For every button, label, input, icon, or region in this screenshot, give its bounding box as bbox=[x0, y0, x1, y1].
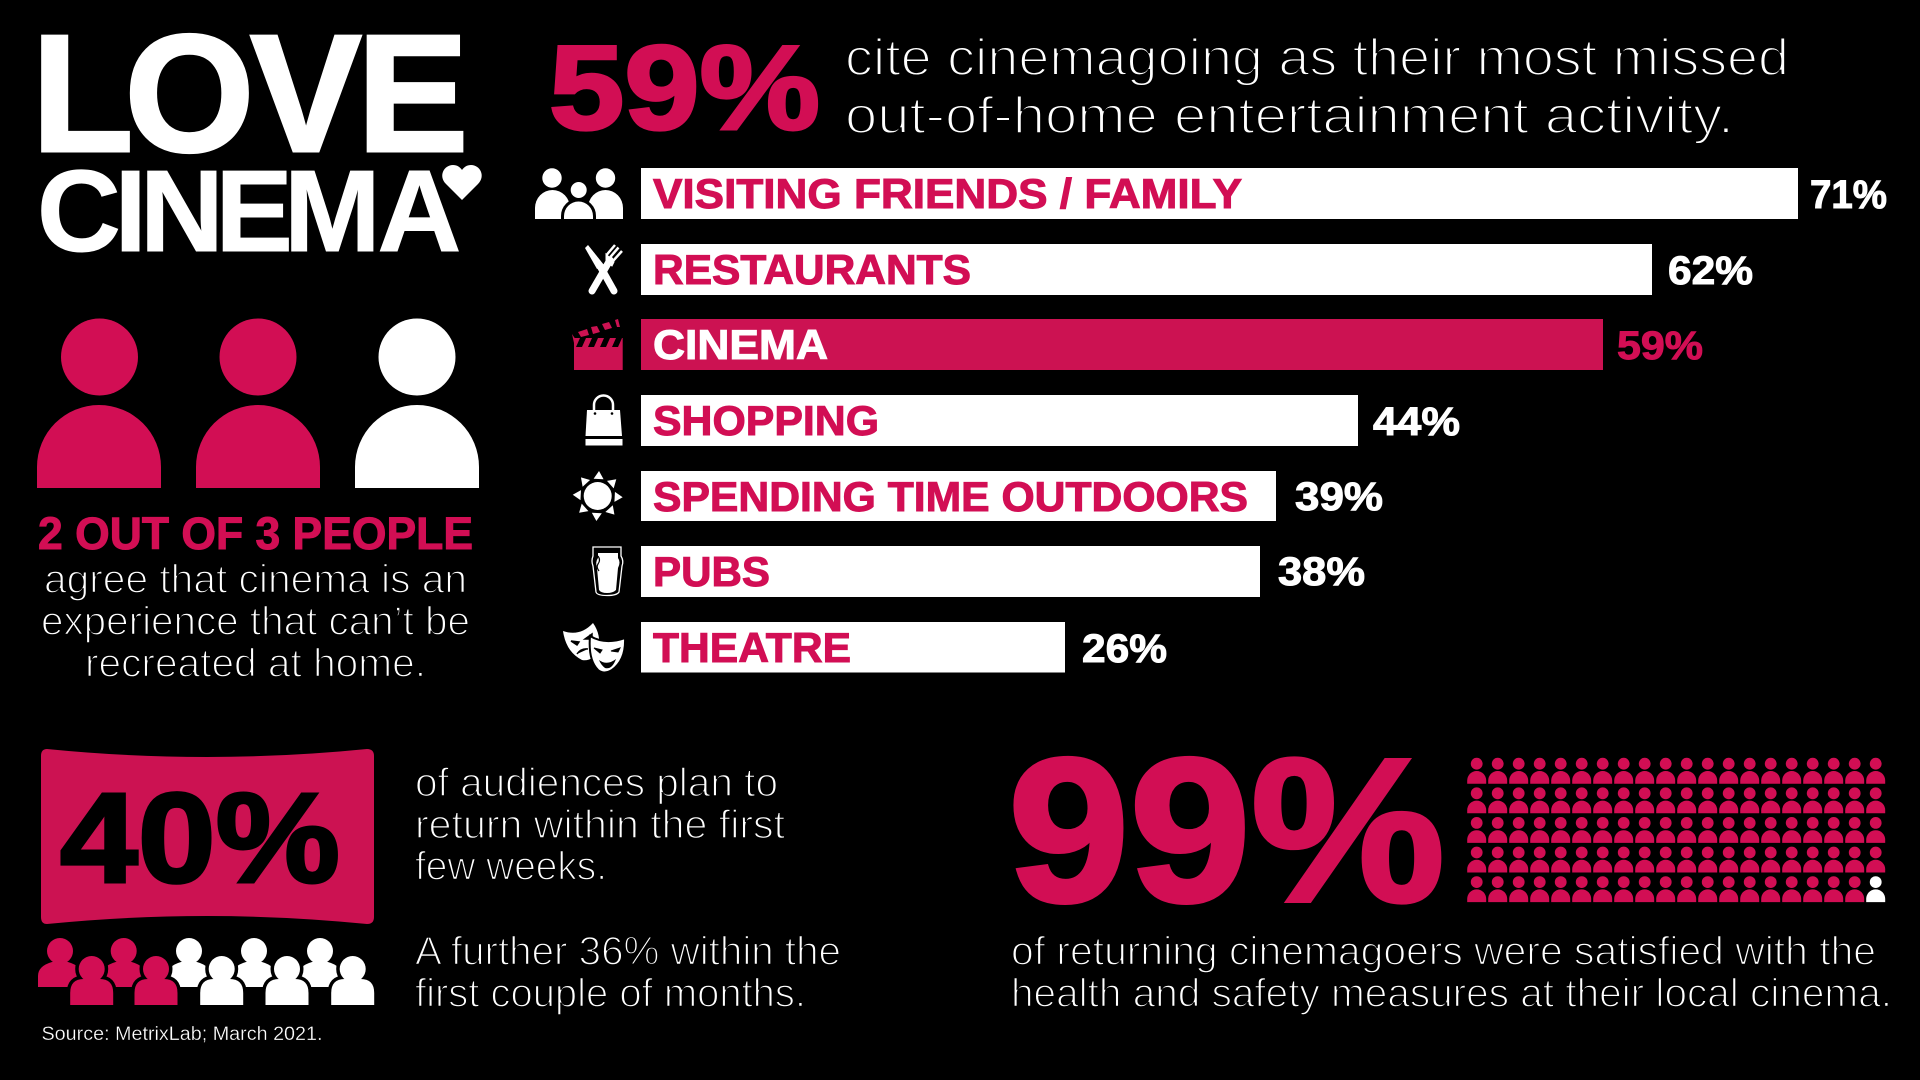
text: cinema experience: agree that cinema is an bbox=[44, 558, 467, 602]
text: further 36%: first couple of months. bbox=[415, 972, 806, 1016]
icon: pint glass bbox=[592, 547, 623, 596]
logo: Love Cinema: CINEMA bbox=[37, 146, 461, 276]
text: return within weeks: few weeks. bbox=[415, 844, 607, 888]
text: further 36%: A further 36% within the bbox=[415, 930, 841, 974]
text: further 36% bbox=[415, 930, 841, 1016]
row: visiting friends / family: 71% bbox=[1810, 173, 1887, 217]
headline text: cite cinemagoing as their most missed bbox=[845, 29, 1789, 87]
row: shopping bbox=[641, 395, 1460, 446]
row: theatre: THEATRE bbox=[653, 624, 851, 671]
icon: theatre masks bbox=[563, 623, 625, 672]
row: spending time outdoors: SPENDING TIME OUTDOORS bbox=[653, 473, 1248, 520]
source note: Source: MetrixLab; March 2021. bbox=[42, 1024, 322, 1045]
icon: shopping bag bbox=[586, 396, 622, 446]
row: restaurants: 62% bbox=[1668, 249, 1753, 293]
stat: 40%: 40% bbox=[60, 767, 340, 910]
headline text bbox=[845, 29, 1789, 145]
pictogram: 100 people bbox=[1467, 758, 1885, 902]
row: visiting friends / family: VISITING FRIENDS / FAMILY bbox=[653, 170, 1242, 217]
text: cinema experience: experience that can’t be bbox=[41, 600, 470, 644]
pictogram: audience bbox=[38, 938, 374, 1005]
icon: knife and fork bbox=[585, 245, 622, 291]
stat: 59%: 59% bbox=[549, 21, 820, 155]
row: pubs: 38% bbox=[1278, 550, 1365, 594]
icon: friends and family bbox=[535, 168, 623, 219]
row: shopping: SHOPPING bbox=[653, 397, 879, 444]
icon: clapperboard bbox=[572, 319, 623, 370]
text: satisfied cinemagoers: health and safety measures at their local cinema. bbox=[1011, 972, 1892, 1016]
icon: sun bbox=[572, 471, 623, 521]
row: pubs bbox=[641, 546, 1365, 597]
text: return within weeks: of audiences plan to bbox=[415, 761, 778, 805]
logo: Love Cinema: LOVE bbox=[32, 1, 468, 187]
row: cinema bbox=[641, 319, 1703, 370]
heading: 2 out of 3 people: 2 OUT OF 3 PEOPLE bbox=[38, 508, 473, 559]
row: shopping: 44% bbox=[1373, 400, 1460, 444]
bar chart bbox=[641, 168, 1887, 672]
text: satisfied cinemagoers: of returning cinemagoers were satisfied with the bbox=[1011, 930, 1876, 974]
row: theatre bbox=[641, 622, 1167, 672]
row: visiting friends / family bbox=[641, 168, 1887, 219]
text: cinema experience bbox=[41, 558, 470, 686]
row: pubs: PUBS bbox=[653, 548, 770, 595]
pictogram: 2 of 3 people bbox=[37, 318, 479, 488]
text: cinema experience: recreated at home. bbox=[85, 642, 426, 686]
row: restaurants bbox=[641, 244, 1753, 295]
logo: Love Cinema bbox=[32, 1, 482, 276]
text: return within weeks bbox=[415, 761, 785, 888]
headline text: out-of-home entertainment activity. bbox=[845, 87, 1734, 145]
row: restaurants: RESTAURANTS bbox=[653, 246, 971, 293]
row: cinema: 59% bbox=[1617, 324, 1703, 368]
text: return within weeks: return within the first bbox=[415, 803, 785, 847]
row: cinema: CINEMA bbox=[653, 321, 828, 368]
panel: 40% cinema screen bbox=[41, 749, 374, 924]
row: theatre: 26% bbox=[1082, 627, 1167, 671]
row: spending time outdoors: 39% bbox=[1295, 475, 1383, 519]
text: satisfied cinemagoers bbox=[1011, 930, 1892, 1016]
stat: 99%: 99% bbox=[1008, 716, 1445, 945]
